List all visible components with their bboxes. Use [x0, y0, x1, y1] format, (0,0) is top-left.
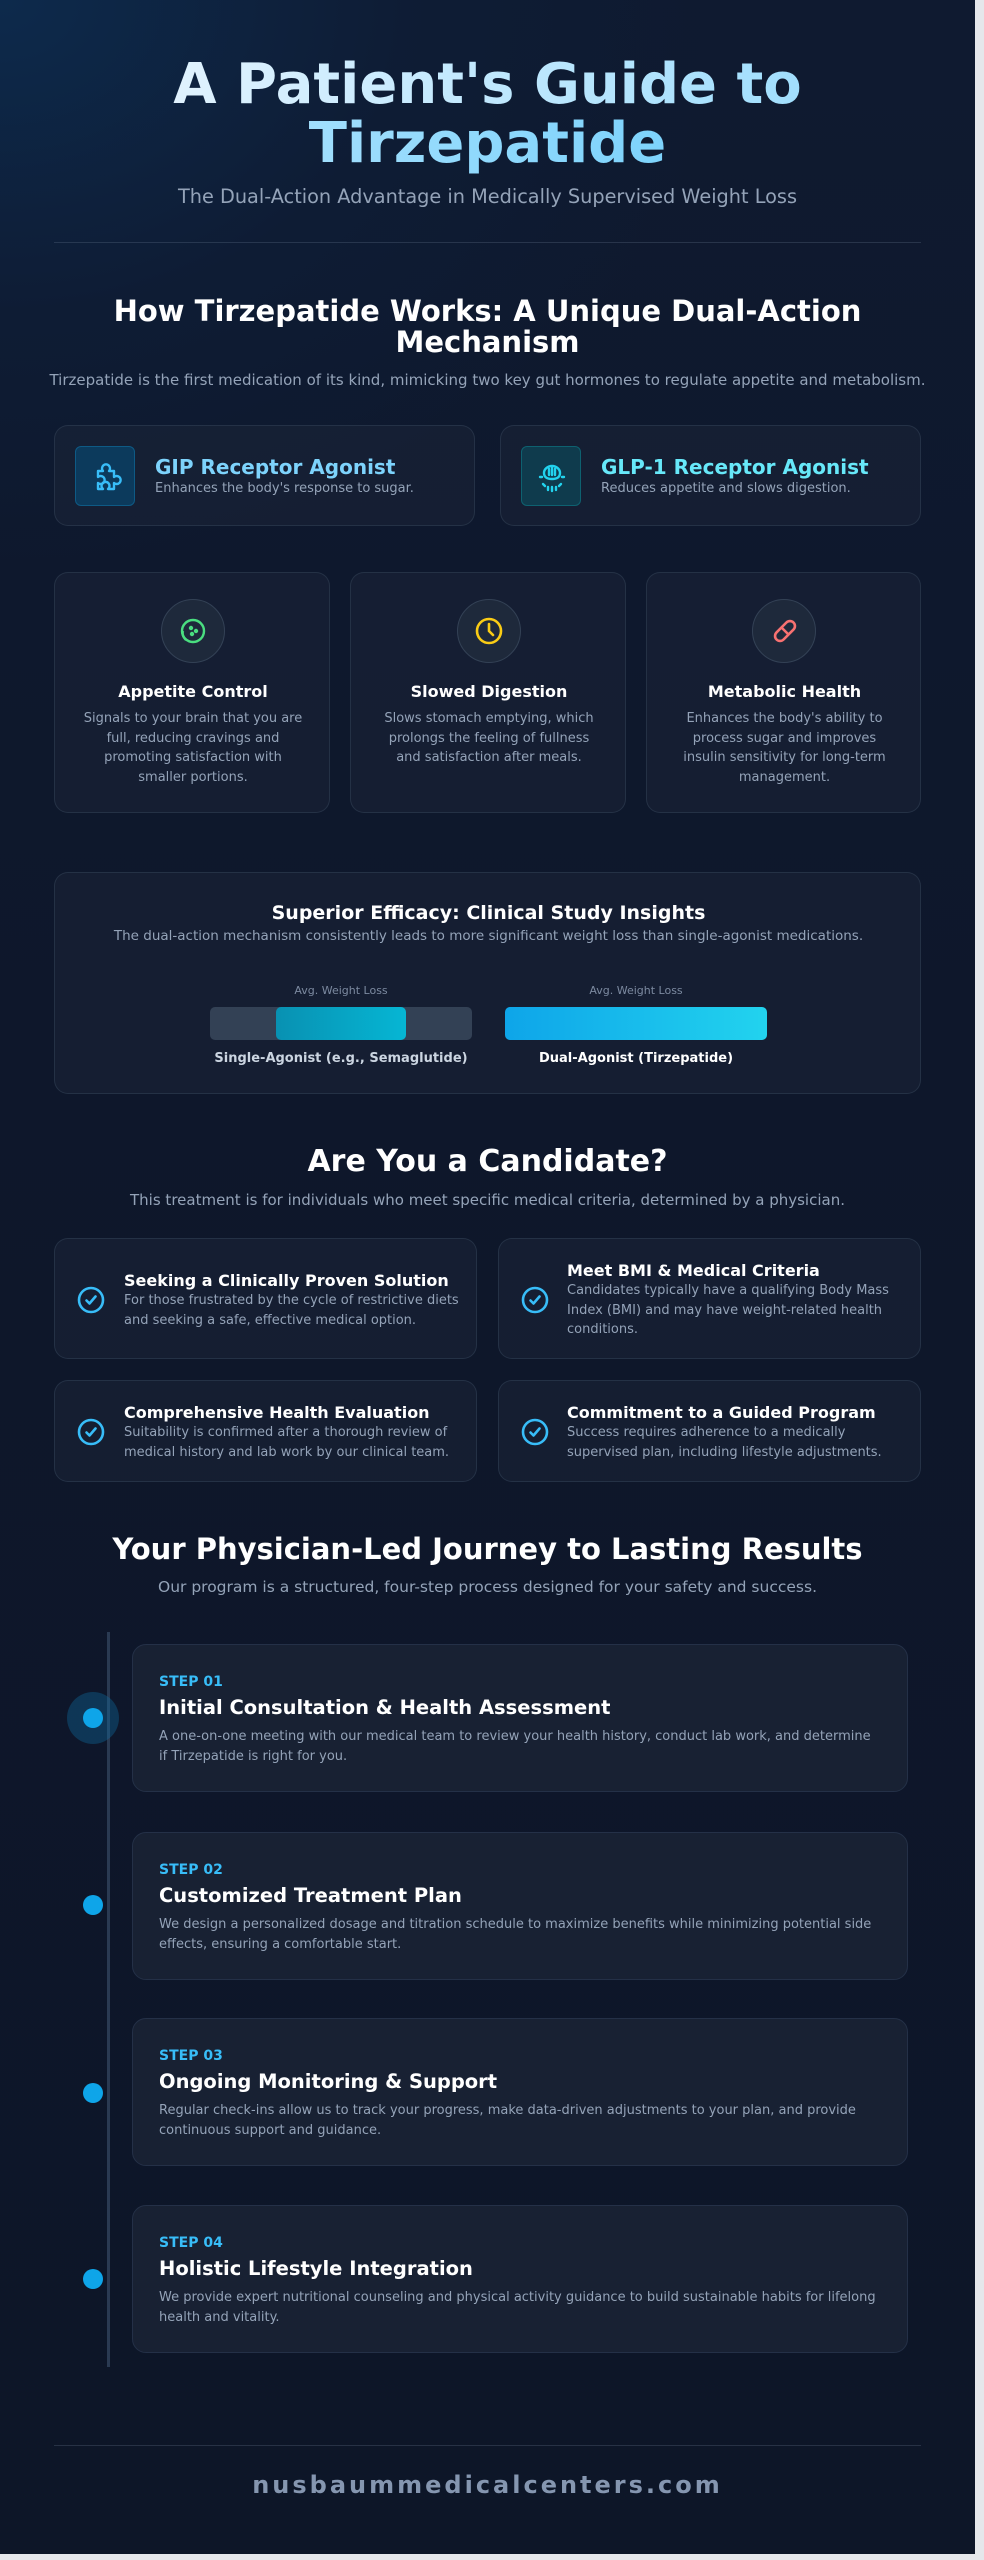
text	[84, 711, 302, 784]
panel: efficacy chart	[54, 872, 921, 1094]
text: insulin sensitivity for long-term	[683, 750, 886, 765]
step 3 card: Regular check-ins allow us to track your progress, make data-driven adjustments to your plan, and provide	[159, 2103, 856, 2118]
step 4 card: Holistic Lifestyle Integration	[159, 2257, 473, 2280]
text	[567, 1403, 882, 1460]
title: Tirzepatide	[309, 111, 666, 176]
panel: GIP receptor agonist	[54, 425, 475, 526]
text: Seeking a Clinically Proven Solution	[124, 1271, 449, 1290]
heading: Appetite Control	[118, 682, 268, 701]
text: management.	[739, 770, 830, 784]
text	[124, 1271, 459, 1328]
text: Enhances the body's response to sugar.	[155, 481, 414, 496]
label: avg weight loss 2: Avg. Weight Loss	[589, 984, 683, 997]
step 2 card: Customized Treatment Plan	[159, 1884, 462, 1907]
section description: Tirzepatide is the first medication of its kind, mimicking two key gut hormones to regulate appetite and metabolism.	[49, 371, 926, 389]
text: promoting satisfaction with	[104, 750, 282, 765]
icon: check	[522, 1418, 548, 1446]
panel: metabolic health	[646, 572, 921, 813]
step 3 card	[132, 2018, 908, 2166]
section heading: candidate: Are You a Candidate?	[307, 1144, 668, 1179]
panel: appetite control	[54, 572, 330, 813]
text: supervised plan, including lifestyle adjustments.	[567, 1444, 882, 1460]
timeline	[67, 1632, 119, 2367]
step 2 card: effects, ensuring a comfortable start.	[159, 1937, 401, 1952]
step 2 card: STEP 02	[159, 1862, 223, 1878]
icon: puzzle	[75, 446, 135, 506]
section description: This treatment is for individuals who meet specific medical criteria, determined by a physician.	[130, 1191, 845, 1209]
section heading: journey: Your Physician-Led Journey to Lasting Results	[112, 1532, 863, 1566]
text: Commitment to a Guided Program	[567, 1403, 876, 1422]
footer: website: nusbaummedicalcenters.com	[252, 2471, 723, 2499]
icon: receptor	[521, 446, 581, 506]
heading: Slowed Digestion	[411, 682, 567, 701]
text: For those frustrated by the cycle of restrictive diets	[124, 1293, 459, 1308]
text: Candidates typically have a qualifying Body Mass	[567, 1283, 889, 1298]
step 2 card: We design a personalized dosage and titration schedule to maximize benefits while minimizing potential side	[159, 1917, 871, 1932]
panel: slowed digestion	[350, 572, 626, 813]
text: and satisfaction after meals.	[396, 750, 582, 765]
text: medical history and lab work by our clinical team.	[124, 1444, 449, 1460]
section heading: how it works	[114, 294, 861, 359]
text	[567, 1261, 889, 1337]
text: Success requires adherence to a medically	[567, 1425, 845, 1440]
text: Index (BMI) and may have weight-related health	[567, 1302, 882, 1318]
heading: Metabolic Health	[708, 682, 861, 701]
text: Signals to your brain that you are	[84, 711, 302, 726]
section heading: how it works: How Tirzepatide Works: A Unique Dual-Action	[114, 294, 861, 328]
label: avg weight loss 1: Avg. Weight Loss	[294, 984, 388, 997]
heading: GIP Receptor Agonist	[155, 455, 395, 479]
text	[384, 711, 594, 765]
icon: pill	[752, 599, 816, 663]
step 4 card	[132, 2205, 908, 2353]
bar: single agonist	[210, 1007, 472, 1040]
subtitle: The Dual-Action Advantage in Medically Supervised Weight Loss	[178, 185, 797, 208]
text: Suitability is confirmed after a thorough review of	[124, 1425, 447, 1440]
heading: Superior Efficacy: Clinical Study Insights	[272, 902, 705, 924]
step 2 marker	[83, 1895, 103, 1915]
title: A Patient's Guide to	[173, 52, 802, 117]
step 1 card: STEP 01	[159, 1674, 223, 1690]
step 2 card	[132, 1832, 908, 1980]
step 1 card: Initial Consultation & Health Assessment	[159, 1696, 610, 1719]
step 1 card: if Tirzepatide is right for you.	[159, 1749, 347, 1764]
text	[683, 711, 886, 784]
icon: check	[78, 1418, 104, 1446]
step 3 card: STEP 03	[159, 2048, 223, 2064]
section heading: how it works: Mechanism	[396, 325, 580, 359]
step 1 marker	[67, 1692, 119, 1744]
step 4 card: health and vitality.	[159, 2310, 280, 2325]
bar chart	[210, 984, 767, 1066]
step 3 card: continuous support and guidance.	[159, 2123, 381, 2138]
text: smaller portions.	[138, 770, 248, 784]
text: Reduces appetite and slows digestion.	[601, 481, 851, 496]
bar: dual agonist	[505, 1007, 767, 1040]
text: and seeking a safe, effective medical option.	[124, 1312, 416, 1328]
panel: GLP-1 receptor agonist	[500, 425, 921, 526]
section description: Our program is a structured, four-step process designed for your safety and success.	[158, 1578, 817, 1596]
step 4 card: We provide expert nutritional counseling and physical activity guidance to build sustainable habits for lifelong	[159, 2290, 876, 2305]
text: prolongs the feeling of fullness	[389, 730, 589, 746]
heading: GLP-1 Receptor Agonist	[601, 455, 869, 479]
icon: clock	[457, 599, 521, 663]
step 1 card	[132, 1644, 908, 1792]
step 1 card: A one-on-one meeting with our medical team to review your health history, conduct lab work, and determine	[159, 1729, 871, 1744]
step 4 card: STEP 04	[159, 2235, 223, 2251]
panel: candidate 4	[498, 1380, 921, 1482]
icon: appetite	[161, 599, 225, 663]
label: dual agonist: Dual-Agonist (Tirzepatide)	[539, 1051, 733, 1066]
subtitle: The dual-action mechanism consistently leads to more significant weight loss than single-agonist medications.	[114, 928, 863, 944]
step 3 marker	[83, 2083, 103, 2103]
icon: check	[78, 1286, 104, 1314]
panel: candidate 1	[54, 1238, 477, 1359]
panel: candidate 2	[498, 1238, 921, 1359]
text: full, reducing cravings and	[107, 730, 279, 746]
text: Meet BMI & Medical Criteria	[567, 1261, 820, 1280]
text: Comprehensive Health Evaluation	[124, 1403, 430, 1422]
panel: candidate 3	[54, 1380, 477, 1482]
step 4 marker	[83, 2269, 103, 2289]
text: process sugar and improves	[693, 730, 876, 746]
icon: check	[522, 1286, 548, 1314]
text: conditions.	[567, 1322, 638, 1337]
step 3 card: Ongoing Monitoring & Support	[159, 2070, 497, 2093]
label: single agonist: Single-Agonist (e.g., Semaglutide)	[214, 1051, 468, 1066]
title	[173, 52, 802, 176]
text	[124, 1403, 449, 1460]
text: Enhances the body's ability to	[686, 711, 883, 726]
text: Slows stomach emptying, which	[384, 711, 594, 726]
